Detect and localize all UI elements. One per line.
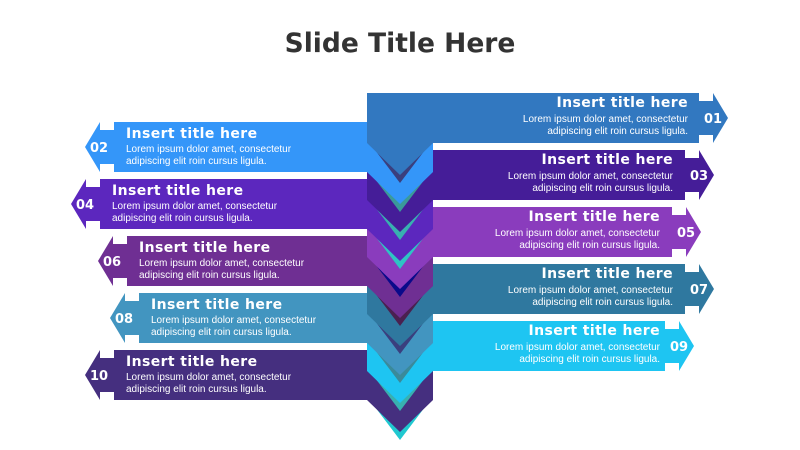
band 01: Insert title here [556, 95, 688, 111]
band 04: Lorem ipsum dolor amet, consectetur [112, 201, 278, 212]
band 02 [85, 122, 367, 172]
band 10 [85, 350, 367, 400]
band 03: Insert title here [542, 152, 673, 168]
band 10: 10 [90, 369, 108, 384]
band 08: adipiscing elit roin cursus ligula. [151, 327, 292, 338]
title: Slide Title Here [285, 28, 515, 59]
band 02: adipiscing elit roin cursus ligula. [126, 156, 267, 167]
band 05: adipiscing elit roin cursus ligula. [519, 240, 660, 251]
band 02: Lorem ipsum dolor amet, consectetur [126, 144, 292, 155]
band 03: Lorem ipsum dolor amet, consectetur [508, 171, 674, 182]
band 01 [367, 93, 728, 143]
band 03 [367, 150, 714, 200]
band 05: Lorem ipsum dolor amet, consectetur [495, 228, 661, 239]
band 09 [367, 321, 694, 371]
band 04: Insert title here [112, 183, 244, 199]
band 03: adipiscing elit roin cursus ligula. [532, 183, 673, 194]
band 02: Insert title here [126, 126, 258, 142]
band 08: 08 [115, 312, 133, 327]
band 04 [71, 179, 367, 229]
band 06 [98, 236, 367, 286]
band 05: 05 [677, 226, 695, 241]
band 08 [110, 293, 367, 343]
band 01: adipiscing elit roin cursus ligula. [547, 126, 688, 137]
band 01: 01 [704, 112, 722, 127]
band 10: Insert title here [126, 354, 258, 370]
chevron stack [367, 93, 433, 440]
band 01: Lorem ipsum dolor amet, consectetur [523, 114, 689, 125]
band 09: Insert title here [528, 323, 660, 339]
band 04: adipiscing elit roin cursus ligula. [112, 213, 253, 224]
band 05 [367, 207, 701, 257]
band 09: adipiscing elit roin cursus ligula. [519, 354, 660, 365]
band 07 [367, 264, 714, 314]
band 10: adipiscing elit roin cursus ligula. [126, 384, 267, 395]
band 04: 04 [76, 198, 94, 213]
band 07: Lorem ipsum dolor amet, consectetur [508, 285, 674, 296]
band 09: Lorem ipsum dolor amet, consectetur [495, 342, 661, 353]
band 06: Lorem ipsum dolor amet, consectetur [139, 258, 305, 269]
band 06: 06 [103, 255, 121, 270]
band 10: Lorem ipsum dolor amet, consectetur [126, 372, 292, 383]
band 09: 09 [670, 340, 688, 355]
band 02: 02 [90, 141, 108, 156]
band 03: 03 [690, 169, 708, 184]
band 08: Lorem ipsum dolor amet, consectetur [151, 315, 317, 326]
band 07: adipiscing elit roin cursus ligula. [532, 297, 673, 308]
band 07: 07 [690, 283, 708, 298]
band 06: adipiscing elit roin cursus ligula. [139, 270, 280, 281]
band 08: Insert title here [151, 297, 282, 313]
band 06: Insert title here [139, 240, 270, 256]
band 07: Insert title here [542, 266, 673, 282]
band 05: Insert title here [528, 209, 660, 225]
